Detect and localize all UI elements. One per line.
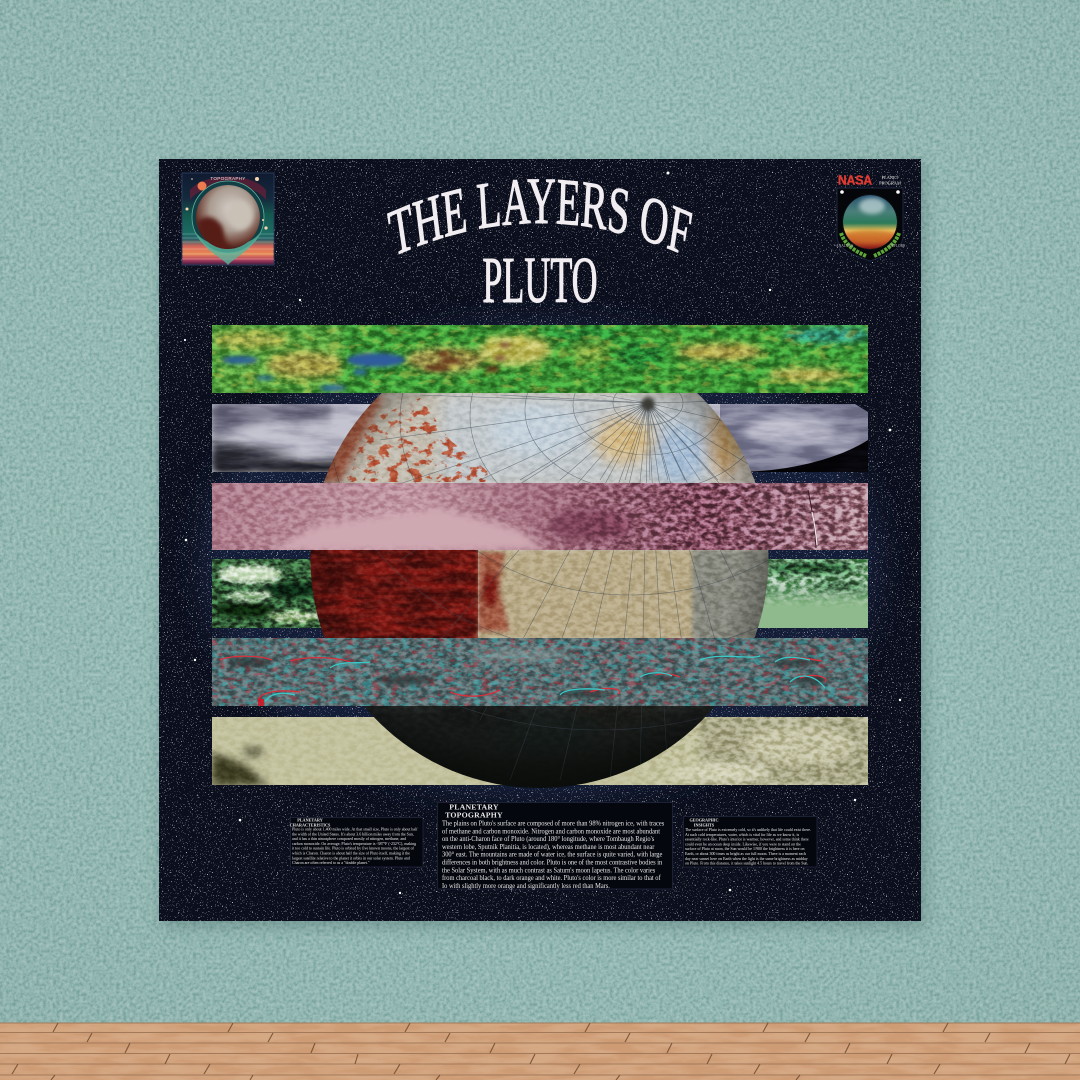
body text: of methane and carbon monoxide. Nitrogen and carbon monoxide are most abundant xyxy=(442,828,660,835)
body text: day near sunset here on Earth when the light is the same brightness as midday xyxy=(685,856,808,861)
heading: PLANETARY xyxy=(297,818,323,822)
patch xyxy=(836,188,906,261)
body text: Earth, or about 300 times as bright as our full moon. There is a moment each xyxy=(685,851,806,857)
body text: surface of Pluto at noon, the Sun would be 1/900 the brightness it is here on xyxy=(685,846,804,852)
body text: on Pluto. From this distance, it takes sunlight 4.5 hours to travel from the Sun. xyxy=(685,861,808,867)
body text: essentially rock-like. Pluto's interior is warmer, however, and some think there xyxy=(685,837,809,843)
body text: on the anti-Charon face of Pluto (around 180° longitude, where Tombaugh Regio's xyxy=(442,836,655,843)
poster shadow xyxy=(162,163,925,926)
body text: from charcoal black, to dark orange and white. Pluto's color is more similar to that of xyxy=(442,875,661,882)
strip 3: pink surface layer xyxy=(212,483,868,550)
heading: TOPOGRAPHY xyxy=(445,810,503,819)
small stars xyxy=(186,177,268,230)
graticule grid lines xyxy=(318,393,768,780)
Pluto globe xyxy=(310,393,768,788)
body text: could even be an ocean deep inside. Likewise, if you were to stand on the xyxy=(685,841,801,847)
heading: PLANETARY xyxy=(449,802,499,812)
body text: The surface of Pluto is extremely cold, so it's unlikely that life could exist there. xyxy=(685,827,811,833)
sun xyxy=(198,182,206,190)
panel: planetary characteristics xyxy=(290,818,423,867)
body text: which is Charon. Charon is about half the size of Pluto itself, making it the xyxy=(292,850,410,856)
body text: the Solar System, with as much contrast as Saturn's moon Iapetus. The color varies xyxy=(442,867,655,874)
body text: The plains on Pluto's surface are composed of more than 98% nitrogen ice, with traces xyxy=(442,820,665,828)
body text: it too cold to sustain life. Pluto is orbited by five known moons, the largest of xyxy=(292,846,415,852)
body text: Pluto is only about 1,400 miles wide. At that small size, Pluto is only about half xyxy=(292,826,418,832)
panel: geographic insights xyxy=(684,816,817,867)
NASA wordmark: NASA xyxy=(838,172,873,188)
heading: GEOGRAPHIC xyxy=(689,818,719,822)
body text: 300° east. The mountains are made of water ice, the surface is quite varied, with large xyxy=(442,851,662,859)
badge heading: TOPOGRAPHY xyxy=(210,176,246,181)
program label: PLANET xyxy=(882,175,899,180)
wooden floor xyxy=(0,1023,1080,1080)
body text: Charon are often referred to as a "double planet." xyxy=(292,860,370,865)
body text: western lobe, Sputnik Planitia, is located), whereas methane is most abundant near xyxy=(442,844,655,851)
starfield background xyxy=(159,159,921,921)
heading: CHARACTERISTICS xyxy=(290,822,331,828)
body text: largest satellite relative to the planet it orbits in our solar system. Pluto and xyxy=(292,855,410,860)
body text: the width of the United States. It's about 3.6 billion miles away from the Sun, xyxy=(292,831,414,837)
body text: At such cold temperatures, water, which is vital for life as we know it, is xyxy=(685,832,800,838)
panel: planetary topography xyxy=(438,802,672,890)
strip 6: pale olive layer xyxy=(212,717,868,785)
north pole vortex xyxy=(641,397,655,411)
left emblem: topography badge xyxy=(182,173,274,265)
body text: differences in both brightness and color. Pluto is one of the most contrastive bodies in xyxy=(442,859,663,867)
strip 4: green layer xyxy=(212,559,875,634)
patch: EXPLORE xyxy=(889,244,906,248)
program label: PROGRAM xyxy=(879,180,901,186)
poster xyxy=(159,159,921,921)
title line 1: curved: THE LAYERS OF xyxy=(387,179,692,254)
strip 1: green topography layer xyxy=(212,325,873,393)
planet Pluto xyxy=(196,185,260,255)
patch: ANALYSIS xyxy=(836,244,853,248)
body text: carbon monoxide. On average, Pluto's temperature is -387°F (-232°C), making xyxy=(292,841,416,847)
mottled red terrain xyxy=(346,398,488,482)
title line 2: PLUTO xyxy=(482,245,598,317)
strip 2: grey ice layer xyxy=(212,404,868,472)
title xyxy=(387,179,692,317)
right emblem: NASA planet program patch xyxy=(836,172,906,261)
body text: Io with slightly more orange and significantly less red than Mars. xyxy=(442,883,610,890)
retro stripes xyxy=(182,234,274,259)
strip 5: anaglyph crater layer xyxy=(212,638,868,706)
body text: and it has a thin atmosphere composed mostly of nitrogen, methane, and xyxy=(292,836,406,842)
heading: INSIGHTS xyxy=(694,822,715,828)
